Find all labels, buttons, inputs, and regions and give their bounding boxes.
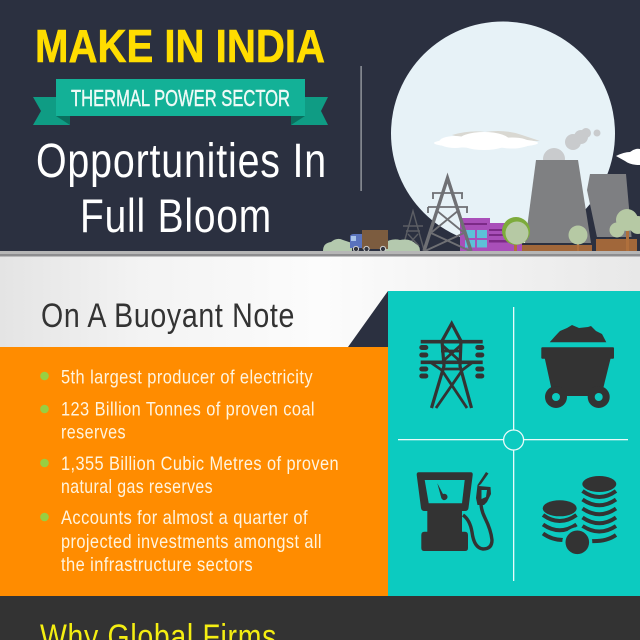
bushes (323, 239, 420, 251)
bullet 4: the infrastructure sectors (61, 554, 253, 576)
clouds (434, 131, 640, 165)
icon: fuel pump (417, 472, 492, 551)
bullet 1: 5th largest producer of electricity (61, 366, 313, 388)
heading: Opportunities In Full Bloom: Full Bloom (80, 189, 272, 242)
ground strip (0, 251, 640, 256)
panel: teal icon grid (388, 291, 640, 596)
ribbon banner: THERMAL POWER SECTOR (71, 85, 290, 111)
heading: Opportunities In Full Bloom (36, 135, 327, 242)
panel: header (0, 0, 640, 252)
bullet 4 (40, 507, 322, 576)
trees (502, 209, 640, 251)
purple building (460, 218, 522, 251)
bullet 2: reserves (61, 422, 126, 444)
ribbon banner (33, 79, 328, 125)
bullet 3 (40, 453, 339, 498)
bullet 3: natural gas reserves (61, 476, 213, 498)
panel: On A Buoyant Note heading band (0, 256, 640, 348)
bullet 3: 1,355 Billion Cubic Metres of proven (61, 453, 339, 475)
panel: Why Global Firms (0, 596, 640, 640)
icon: transmission tower (419, 324, 484, 408)
icon: coal cart (541, 325, 614, 408)
moon circle (391, 22, 615, 246)
smoke (543, 128, 600, 170)
cooling towers (521, 160, 637, 251)
transmission towers (402, 178, 471, 251)
heading: Opportunities In Full Bloom: Opportunities In (36, 135, 327, 188)
heading: On A Buoyant Note (41, 297, 295, 335)
truck (350, 230, 388, 252)
bullet 4: projected investments amongst all (61, 531, 322, 553)
panel: key facts (0, 347, 388, 596)
icon: coin stacks (543, 476, 616, 557)
bullet 2 (40, 398, 315, 444)
illustration: thermal power plant scene (323, 22, 640, 252)
title: Make in India: MAKE IN INDIA (35, 20, 325, 72)
bullet list (40, 366, 339, 576)
bullet 4: Accounts for almost a quarter of (61, 507, 308, 529)
bullet 2: 123 Billion Tonnes of proven coal (61, 398, 315, 420)
